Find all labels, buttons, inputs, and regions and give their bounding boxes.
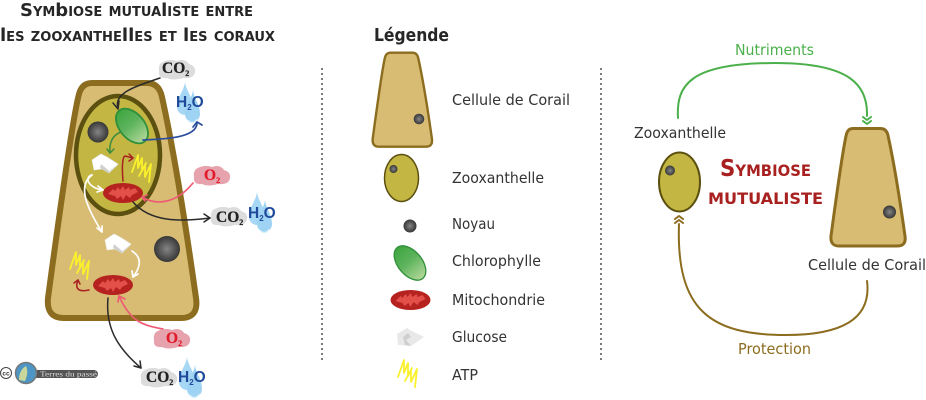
lower mitochondrion <box>93 275 133 295</box>
CO2 cloud bottom <box>141 368 177 388</box>
legend: zooxanthella <box>384 154 544 202</box>
arrow: lower glucose to mitochondrion <box>132 251 139 277</box>
H2O top: O <box>192 94 204 111</box>
title: Symbiose mutualiste entre <box>20 0 253 21</box>
legend heading: Légende <box>374 25 449 46</box>
heading: symbiose mutualiste: Symbiose <box>720 156 811 182</box>
CO2 cloud right: 2 <box>239 218 243 227</box>
label: zooxanthelle: Zooxanthelle <box>634 124 726 142</box>
O2 cloud lower: 2 <box>178 339 182 348</box>
arrow: chloroplast to H2O <box>143 122 202 140</box>
coral nucleus <box>154 236 180 262</box>
legend: coral cell: Cellule de Corail <box>452 91 570 109</box>
panel: detailed coral cell diagram <box>48 60 276 397</box>
CO2 cloud top: CO <box>162 60 185 77</box>
H2O top: 2 <box>187 103 192 112</box>
upper glucose <box>92 154 118 173</box>
title: les zooxanthelles et les coraux <box>0 25 275 46</box>
arrow: lower mitochondrion to CO2 <box>108 298 141 368</box>
O2 cloud lower <box>154 329 190 348</box>
panel: legend <box>373 25 570 387</box>
arrow: lower mitochondrion to ATP <box>74 280 89 291</box>
H2O top: H <box>176 94 187 111</box>
arrow: upper mitochondrion to CO2 <box>133 202 210 222</box>
arrow: O2 to lower mitochondrion <box>118 296 163 329</box>
H2O right: 2 <box>259 214 264 223</box>
H2O top <box>176 82 204 122</box>
title <box>0 0 275 46</box>
divider left <box>321 68 323 360</box>
chloroplast <box>110 103 154 149</box>
legend: mitochondrion <box>390 290 545 310</box>
O2 cloud upper: O <box>204 167 216 184</box>
divider right <box>600 68 602 360</box>
CO2 cloud bottom: 2 <box>169 378 173 387</box>
CO2 cloud top: 2 <box>185 69 189 78</box>
zooxanthella <box>659 152 700 212</box>
legend: chlorophyll <box>388 240 541 286</box>
legend: coral cell <box>373 53 570 147</box>
zooxanthella nucleus <box>88 122 108 142</box>
arrow: glucose to mitochondrion and out <box>85 175 103 232</box>
legend: nucleus <box>404 215 495 233</box>
O2 cloud lower: O <box>166 330 178 347</box>
arrow: mitochondrion to ATP <box>122 154 133 181</box>
coral cell <box>831 128 905 246</box>
CO2 cloud top <box>159 60 195 80</box>
legend: chlorophyll: Chlorophylle <box>452 252 541 270</box>
H2O right: H <box>248 205 259 222</box>
H2O bottom: O <box>194 369 206 386</box>
H2O right <box>248 192 276 232</box>
O2 cloud upper: 2 <box>216 176 220 185</box>
arrow: nutriments <box>678 63 871 124</box>
CO2 cloud bottom: CO <box>146 369 169 386</box>
H2O bottom: H <box>178 369 189 386</box>
lower glucose <box>105 234 131 253</box>
legend: mitochondrion: Mitochondrie <box>452 291 545 309</box>
legend: nucleus: Noyau <box>452 215 495 233</box>
CO2 cloud right <box>211 207 247 227</box>
label: nutriments: Nutriments <box>735 41 814 59</box>
lower ATP <box>70 252 89 279</box>
H2O right: O <box>264 205 276 222</box>
upper mitochondrion <box>103 183 143 203</box>
H2O bottom: 2 <box>189 378 194 387</box>
legend: zooxanthella: Zooxanthelle <box>452 169 544 187</box>
H2O bottom <box>178 357 206 397</box>
CO2 cloud right: CO <box>216 209 239 226</box>
legend: ATP <box>398 360 478 387</box>
arrow: CO2 to chloroplast <box>113 78 160 109</box>
label: protection: Protection <box>738 340 811 358</box>
arrow: protection <box>675 216 868 335</box>
heading: symbiose mutualiste: mutualiste <box>708 184 823 210</box>
coral cell <box>48 83 196 318</box>
arrow: O2 to upper mitochondrion <box>142 183 193 202</box>
O2 cloud upper <box>194 166 230 186</box>
zooxanthella <box>76 96 160 214</box>
credit badge: cc <box>2 370 10 378</box>
legend: glucose <box>397 328 507 346</box>
panel: symbiosis cycle <box>634 41 926 358</box>
legend: glucose: Glucose <box>452 328 507 346</box>
credit badge <box>0 362 98 384</box>
legend: ATP: ATP <box>452 366 478 384</box>
arrow: chloroplast to glucose <box>107 132 121 153</box>
upper ATP <box>132 155 151 182</box>
heading: symbiose mutualiste <box>708 156 823 210</box>
credit badge: Terres du passé <box>40 370 98 378</box>
